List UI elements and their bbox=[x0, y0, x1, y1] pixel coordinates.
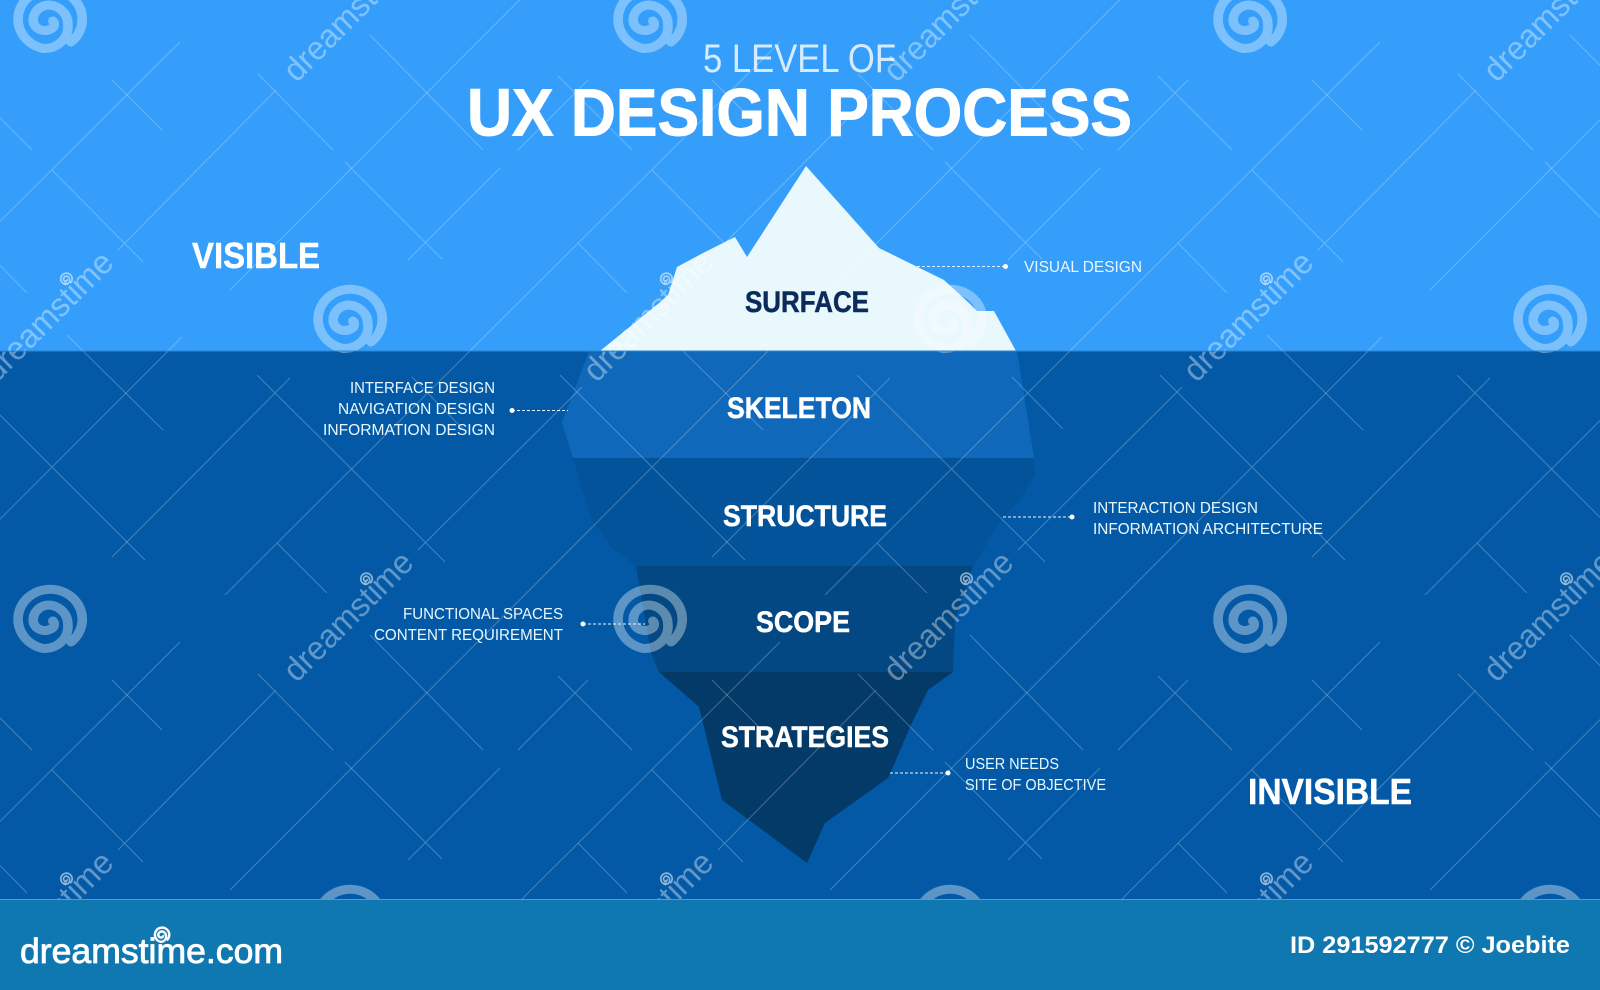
layer name: skeleton: SKELETON bbox=[727, 392, 871, 425]
callout: structure items bbox=[1003, 500, 1323, 538]
callout: strategies items: SITE OF OBJECTIVE bbox=[965, 777, 1106, 794]
label: invisible: INVISIBLE bbox=[1248, 771, 1412, 812]
ocean background bbox=[0, 351, 1600, 899]
title: kicker: 5 LEVEL OF bbox=[703, 37, 896, 81]
watermark: dreamstime text: dreamstime bbox=[275, 543, 420, 688]
iceberg layer: surface bbox=[600, 166, 1016, 351]
label: visible: VISIBLE bbox=[192, 235, 320, 276]
iceberg layer: scope bbox=[636, 566, 973, 672]
callout: skeleton items: INTERFACE DESIGN bbox=[350, 380, 495, 397]
callout: strategies items: USER NEEDS bbox=[965, 756, 1059, 773]
footer logo spiral bbox=[155, 928, 169, 942]
callout: visual design bbox=[917, 259, 1142, 276]
footer logo text: dreamstime.com bbox=[20, 932, 283, 971]
callout: skeleton items: INFORMATION DESIGN bbox=[323, 422, 495, 439]
callout: scope items: FUNCTIONAL SPACES bbox=[403, 606, 563, 623]
watermark: dreamstime text: dreamstime bbox=[1175, 843, 1320, 988]
callout: scope items bbox=[374, 606, 645, 644]
callout: skeleton items bbox=[323, 380, 568, 439]
callout: structure items: INTERACTION DESIGN bbox=[1093, 500, 1258, 517]
layer name: strategies: STRATEGIES bbox=[721, 721, 889, 754]
layer name: scope: SCOPE bbox=[756, 606, 850, 639]
iceberg bbox=[562, 166, 1035, 863]
watermark: dreamstime text: dreamstime bbox=[575, 243, 720, 388]
watermark: dreamstime text: dreamstime bbox=[875, 543, 1020, 688]
callout: skeleton items: NAVIGATION DESIGN bbox=[338, 401, 495, 418]
footer bar bbox=[0, 899, 1600, 990]
iceberg layer: skeleton bbox=[562, 351, 1034, 458]
callout: scope items: CONTENT REQUIREMENT bbox=[374, 627, 564, 644]
waterline bbox=[0, 350, 1600, 352]
title bbox=[467, 37, 1132, 150]
title: main heading: UX DESIGN PROCESS bbox=[467, 76, 1132, 150]
callout: strategies items bbox=[890, 756, 1106, 794]
watermark: dreamstime text: dreamstime bbox=[1175, 243, 1320, 388]
layer name: structure: STRUCTURE bbox=[723, 500, 887, 533]
iceberg layer: strategies bbox=[659, 672, 953, 863]
sky background bbox=[0, 0, 1600, 351]
callout: structure items: INFORMATION ARCHITECTURE bbox=[1093, 521, 1323, 538]
iceberg layer: structure bbox=[573, 458, 1035, 566]
layer name: surface: SURFACE bbox=[745, 286, 869, 319]
callout: visual design: VISUAL DESIGN bbox=[1024, 259, 1142, 276]
footer image id: ID 291592777 © Joebite bbox=[1290, 932, 1570, 959]
watermark: dreamstime text: dreamstime bbox=[575, 843, 720, 988]
